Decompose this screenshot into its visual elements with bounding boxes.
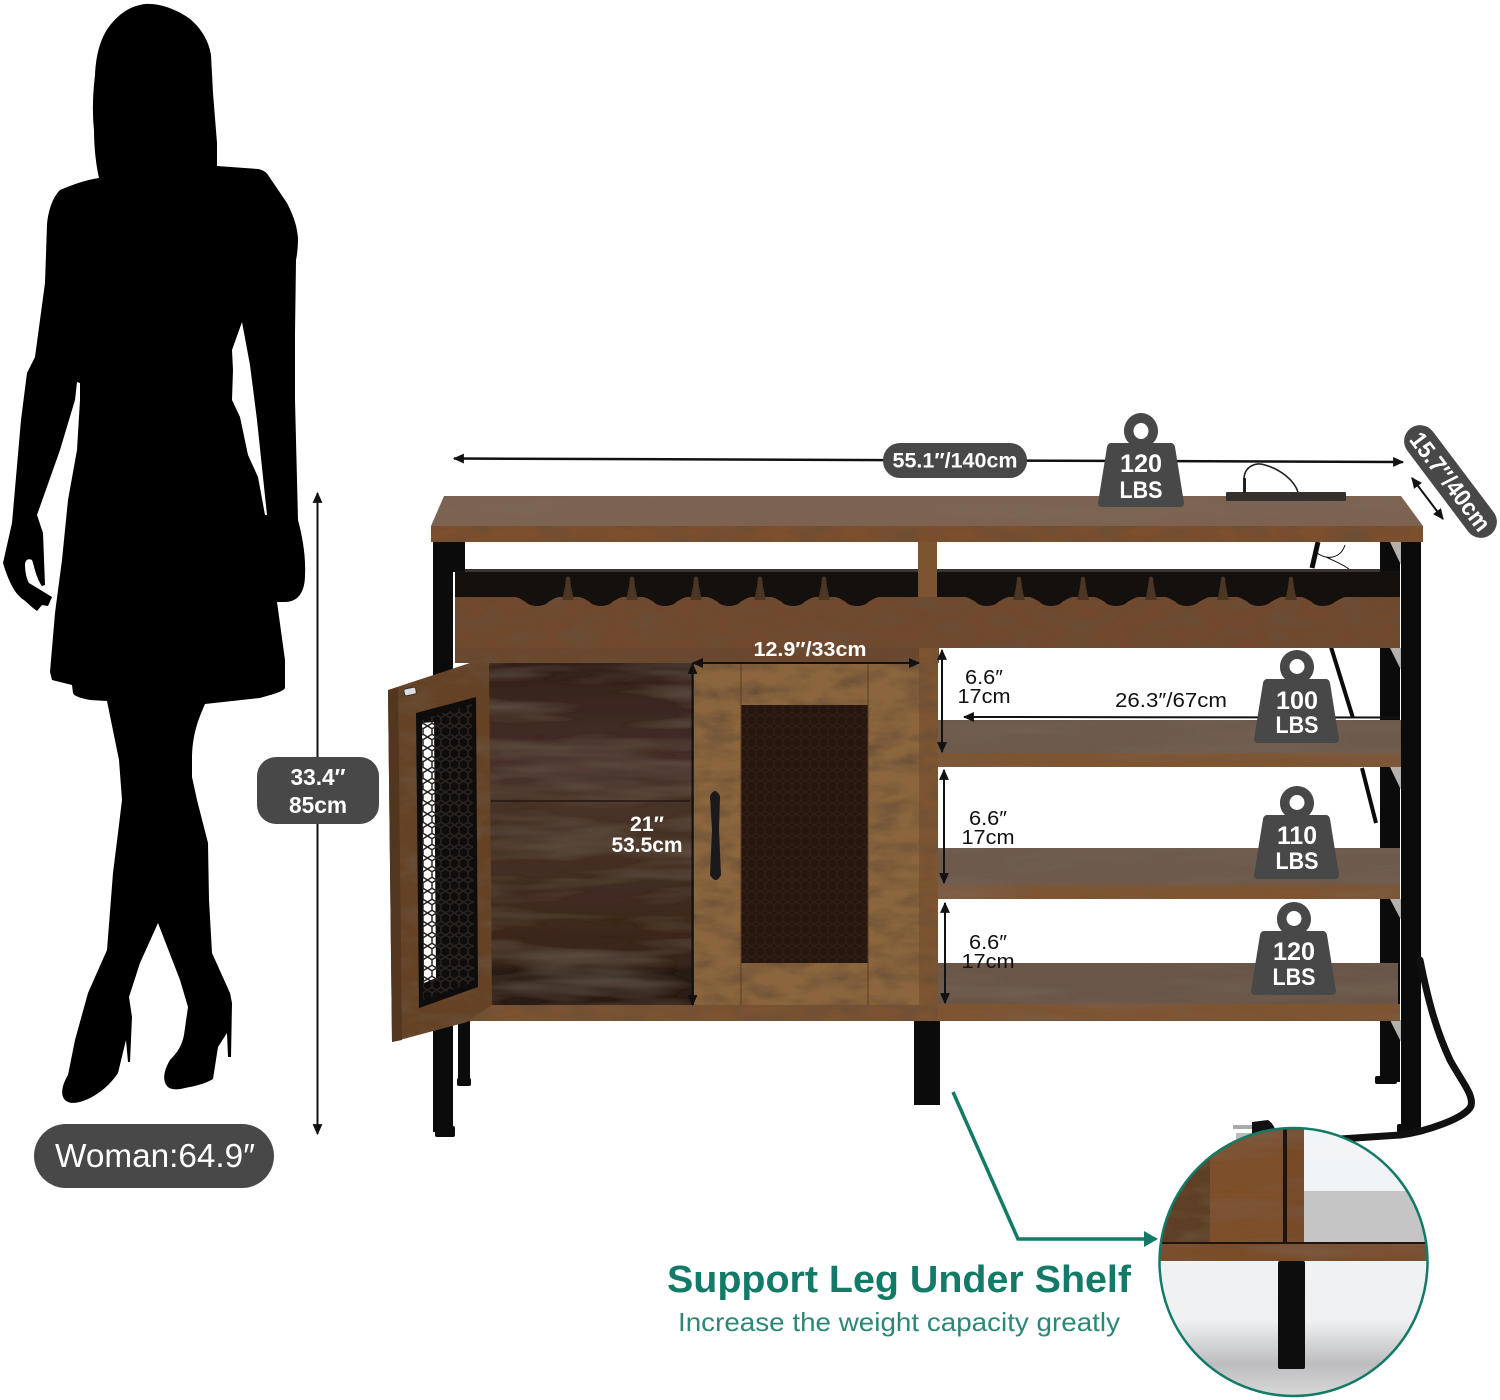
detail circle: support leg close-up xyxy=(1150,1128,1440,1396)
shelf gap arrow 1 xyxy=(941,650,943,752)
tabletop surface xyxy=(431,496,1423,526)
cabinet height arrow xyxy=(692,664,694,1005)
cabinet top band xyxy=(455,648,939,663)
shelf width arrow xyxy=(964,716,1400,718)
shelf 3 xyxy=(938,963,1400,1020)
shelf gap label 2 xyxy=(962,808,1014,849)
center divider xyxy=(918,542,937,602)
width label pill xyxy=(883,443,1027,478)
weight tag shelf 2 110 LBS xyxy=(1254,786,1339,879)
height label pill: 85cm xyxy=(289,792,347,818)
width arrow 55.1 in xyxy=(454,458,1403,462)
door width arrow xyxy=(693,662,919,664)
shelf gap label 1: 17cm xyxy=(958,686,1010,708)
tabletop front edge xyxy=(431,526,1423,542)
weight tag shelf 3 120 LBS: 120 xyxy=(1273,938,1315,966)
height arrow 33.4 in xyxy=(316,493,318,1134)
back diagonal brace xyxy=(1312,542,1376,823)
icon: plug above circle xyxy=(1233,1120,1276,1145)
power cord xyxy=(1340,960,1471,1139)
label: door width 12.9 in: 12.9″/33cm xyxy=(754,639,866,661)
wine glass rack xyxy=(455,542,1400,648)
closed door xyxy=(694,663,919,1005)
label: cabinet height 21 in: 53.5cm xyxy=(612,834,682,857)
shelf 1 xyxy=(938,720,1401,767)
label: cabinet height 21 in xyxy=(612,813,682,857)
shelf gap label 3: 17cm xyxy=(962,951,1014,973)
corner brackets xyxy=(1390,542,1401,1042)
callout subheading: Increase the weight capacity greatly xyxy=(678,1307,1120,1337)
callout heading: Support Leg Under Shelf xyxy=(667,1259,1131,1301)
weight tag top 120 LBS: 120 xyxy=(1120,450,1162,478)
shelf gap arrow 2 xyxy=(943,770,945,883)
interior back seam xyxy=(491,800,690,802)
weight tag shelf 1 100 LBS: LBS xyxy=(1276,712,1318,739)
weight tag shelf 3 120 LBS xyxy=(1251,902,1336,995)
base plank xyxy=(469,1005,1400,1021)
cabinet interior xyxy=(489,663,695,1005)
shelf 2 xyxy=(938,848,1400,899)
weight tag shelf 1 100 LBS xyxy=(1254,650,1339,743)
width label pill: 55.1″/140cm xyxy=(892,450,1018,472)
woman height pill: Woman:64.9″ xyxy=(55,1137,255,1174)
height label pill: 33.4″ xyxy=(290,764,346,790)
label: cabinet height 21 in: 21″ xyxy=(630,813,664,836)
weight tag shelf 3 120 LBS: LBS xyxy=(1272,964,1316,991)
shelf gap label 3 xyxy=(962,932,1014,973)
weight tag shelf 1 100 LBS: 100 xyxy=(1276,687,1318,715)
callout arrow xyxy=(953,1092,1158,1247)
door handle xyxy=(710,791,721,880)
open door xyxy=(388,663,492,1042)
shelf gap arrow 3 xyxy=(944,903,946,1003)
woman height pill xyxy=(34,1124,274,1188)
weight tag top 120 LBS xyxy=(1098,413,1184,507)
power strip xyxy=(1226,464,1346,501)
shelf gap label 2: 6.6″ xyxy=(969,808,1007,830)
shelf gap label 3: 6.6″ xyxy=(969,932,1007,954)
shelf width label: 26.3″/67cm xyxy=(1115,690,1227,712)
depth arrow xyxy=(1412,478,1443,519)
weight tag shelf 2 110 LBS: 110 xyxy=(1277,822,1317,850)
drawer front xyxy=(455,597,1400,648)
weight tag top 120 LBS: LBS xyxy=(1120,477,1162,504)
cabinet right side panel xyxy=(919,648,938,1008)
front right leg overlay xyxy=(1401,542,1421,1132)
weight tag shelf 2 110 LBS: LBS xyxy=(1276,848,1318,875)
woman silhouette xyxy=(3,4,305,1103)
depth label pill: 15.7″/40cm xyxy=(1404,427,1496,537)
sideboard furniture xyxy=(388,464,1471,1139)
height label pill xyxy=(257,757,379,824)
shelf gap label 2: 17cm xyxy=(962,827,1014,849)
rear and front metal legs xyxy=(433,542,1421,1137)
shelf gap label 1 xyxy=(958,667,1010,708)
shelf gap label 1: 6.6″ xyxy=(965,667,1003,689)
